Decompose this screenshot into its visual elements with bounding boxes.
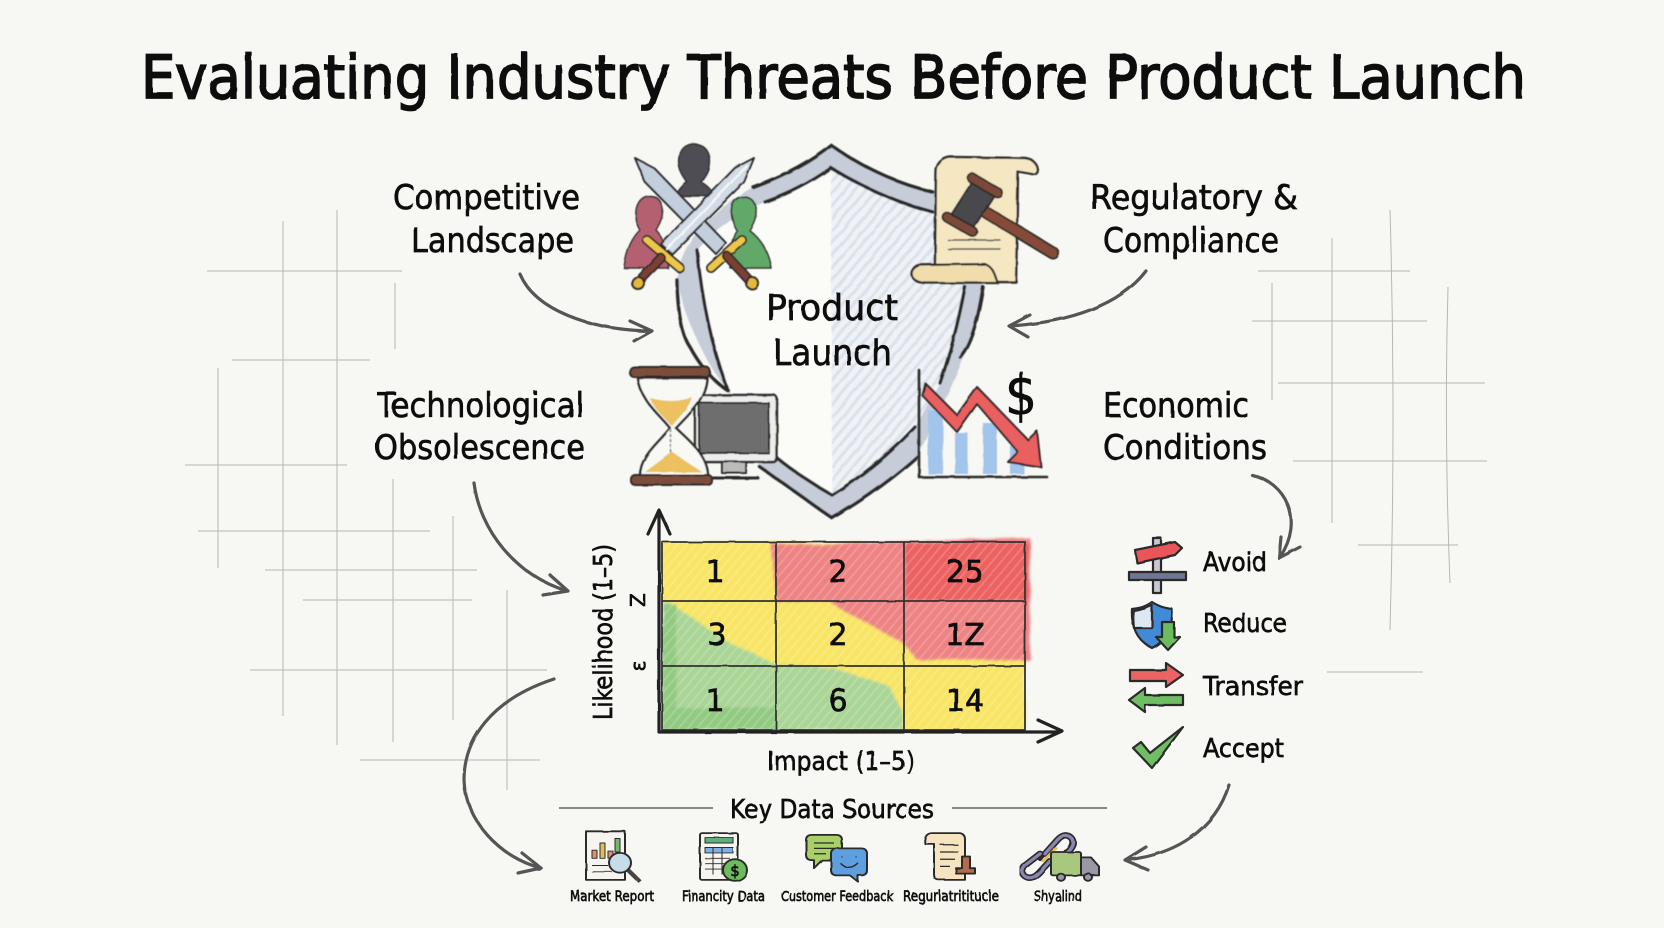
label: Market Report: Market Report xyxy=(570,889,654,905)
icon: customer feedback xyxy=(806,835,867,882)
scroll xyxy=(912,157,1038,282)
arrow: economic to responses xyxy=(1252,475,1300,558)
shield inner face xyxy=(697,168,965,495)
matrix colour fills xyxy=(662,538,1030,730)
stray y axis ticks: ε xyxy=(626,661,650,671)
stray y axis ticks xyxy=(626,593,650,671)
chart bars xyxy=(928,410,1024,474)
icon: scroll and gavel xyxy=(912,157,1053,283)
label: Regurlatrititucle: Regurlatrititucle xyxy=(903,889,999,905)
dark competitor xyxy=(676,144,714,196)
gavel head xyxy=(960,186,985,225)
label: Technological Obsolescence: Technological xyxy=(376,386,584,426)
text: Transfer: Transfer xyxy=(1202,672,1303,702)
heading: Key Data Sources xyxy=(730,795,934,825)
response strategies legend xyxy=(1129,538,1303,768)
matrix values: 1 xyxy=(705,555,725,590)
arrow: regulatory to shield xyxy=(1009,271,1146,337)
icon: signpost xyxy=(1129,538,1186,593)
matrix hatch texture xyxy=(662,542,1025,730)
heading rules xyxy=(559,807,1107,809)
label: Technological Obsolescence xyxy=(374,386,585,468)
scroll text lines xyxy=(948,240,1000,249)
text: Accept: Accept xyxy=(1203,734,1284,764)
icon: shield with arrow xyxy=(1132,602,1180,650)
shield silver rim xyxy=(677,145,983,518)
monitor xyxy=(695,395,777,478)
gavel handle xyxy=(987,213,1053,253)
matrix values: 2 xyxy=(828,618,848,653)
text: Reduce: Reduce xyxy=(1203,609,1287,639)
label: Competitive Landscape: Competitive xyxy=(393,178,580,218)
shield label: Product Launch: Product xyxy=(766,288,898,329)
falling red arrow xyxy=(922,383,1041,467)
matrix axes xyxy=(648,510,1062,742)
y axis label: Likelihood (1–5) xyxy=(589,544,619,720)
arrow: responses to data sources xyxy=(1125,785,1229,870)
shield label: Product Launch xyxy=(766,288,898,374)
stray y axis ticks: Z xyxy=(626,593,650,607)
matrix values: 1Z xyxy=(945,618,985,653)
label: Competitive Landscape xyxy=(393,178,580,261)
x axis label: Impact (1–5) xyxy=(767,747,915,777)
arrow: competitive to shield xyxy=(520,274,652,341)
key data sources xyxy=(559,795,1107,905)
label: Customer Feedback: Customer Feedback xyxy=(781,889,894,905)
shield label: Product Launch: Launch xyxy=(773,333,892,374)
shield outlines xyxy=(677,145,983,518)
matrix values: 25 xyxy=(946,555,984,590)
sword two xyxy=(661,158,754,254)
coin dollar: $ xyxy=(730,862,740,880)
icon: market report xyxy=(586,831,640,882)
icon: regulation scroll and stamp xyxy=(925,833,975,880)
sword one xyxy=(635,158,726,254)
label: Regulatory & Compliance xyxy=(1090,178,1298,261)
label: Regulatory & Compliance: Compliance xyxy=(1103,221,1279,261)
shield shaded right half xyxy=(831,168,965,495)
icon: competitors and crossed swords xyxy=(624,144,771,289)
label: Economic Conditions: Economic xyxy=(1103,386,1249,426)
label: Shyalind: Shyalind xyxy=(1034,889,1082,905)
icon: falling economic chart xyxy=(919,370,1047,477)
icon: supply chain link and truck xyxy=(1022,835,1099,881)
green competitor xyxy=(730,197,771,268)
risk matrix xyxy=(589,510,1062,777)
title: Evaluating Industry Threats Before Product Launch xyxy=(141,43,1526,113)
matrix values: 6 xyxy=(828,684,848,719)
icon: financial data xyxy=(700,833,747,881)
curved arrows xyxy=(464,271,1300,873)
label: Financity Data: Financity Data xyxy=(682,889,765,905)
red competitor xyxy=(624,196,668,268)
label: Competitive Landscape: Landscape xyxy=(411,221,574,261)
scroll curl bottom xyxy=(912,264,998,283)
matrix values xyxy=(705,555,985,719)
hourglass xyxy=(630,367,712,485)
shield: product launch xyxy=(677,145,983,518)
label: Technological Obsolescence: Obsolescence xyxy=(374,428,585,468)
matrix values: 2 xyxy=(828,555,848,590)
label: Regulatory & Compliance: Regulatory & xyxy=(1090,178,1298,218)
arrow: matrix to data sources xyxy=(464,679,554,873)
label: Economic Conditions: Conditions xyxy=(1103,428,1267,468)
matrix grid xyxy=(662,542,1025,730)
chart axes xyxy=(919,370,1047,477)
icon: transfer arrows xyxy=(1129,663,1183,712)
icon: hourglass and monitor xyxy=(630,367,777,485)
text: Avoid: Avoid xyxy=(1203,548,1267,578)
matrix values: 14 xyxy=(946,684,984,719)
dollar sign: $ xyxy=(1005,363,1037,428)
threat labels xyxy=(374,178,1298,468)
matrix values: 1 xyxy=(705,684,725,719)
matrix values: 3 xyxy=(707,618,727,653)
arrow: technological to matrix xyxy=(474,483,568,595)
label: Economic Conditions xyxy=(1103,386,1267,468)
icon: check mark xyxy=(1133,727,1183,768)
